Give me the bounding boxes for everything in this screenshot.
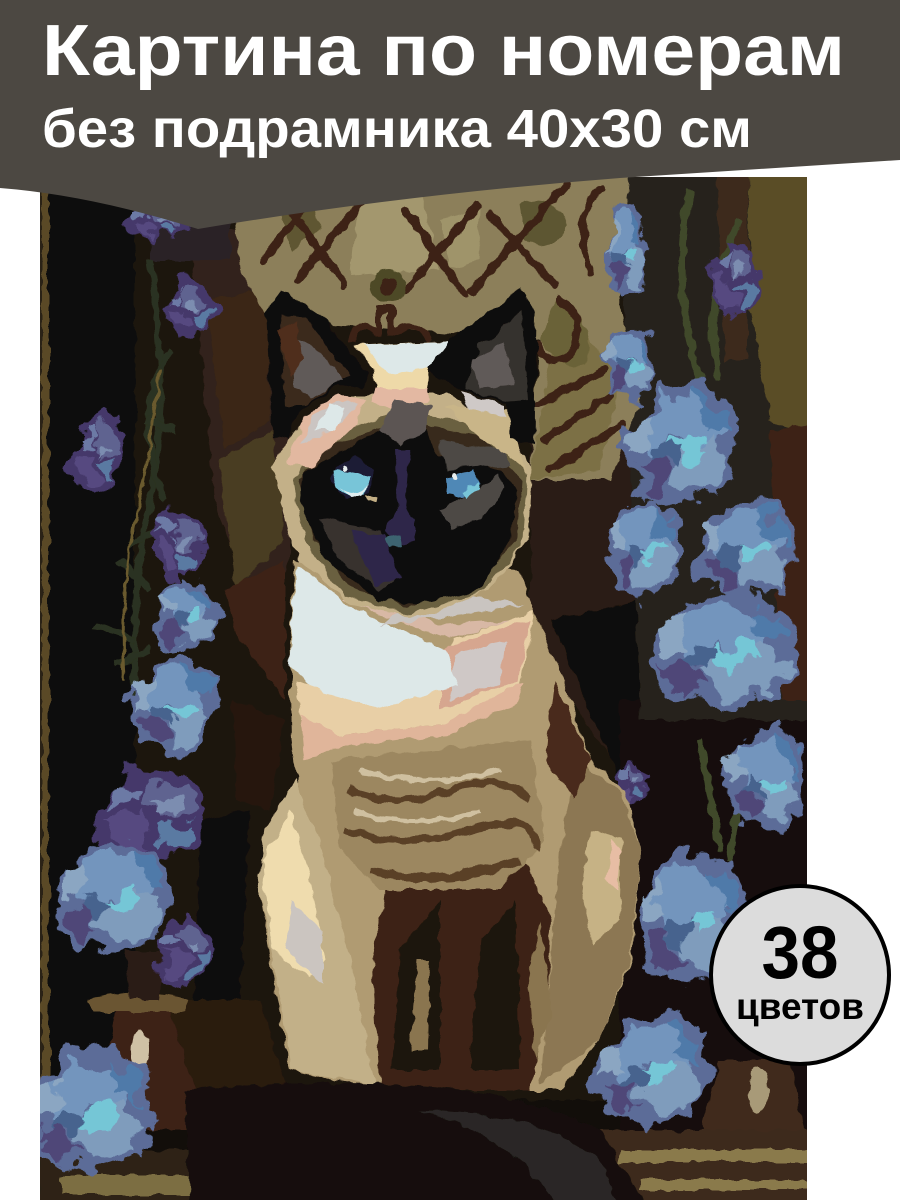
subtitle: без подрамника 40х30 см xyxy=(42,99,752,159)
cat chest xyxy=(290,565,525,708)
stems and leaves left xyxy=(95,260,175,700)
wallpaper xyxy=(230,170,640,480)
cat body xyxy=(258,560,640,1090)
ledge and vase right xyxy=(40,1060,815,1200)
cat ears xyxy=(265,288,537,444)
dark tail and ledge xyxy=(185,1083,650,1200)
cat face xyxy=(300,400,518,603)
vase left xyxy=(88,950,195,1130)
cat head xyxy=(272,342,532,618)
badge: 38 colours: 38 xyxy=(762,911,838,994)
stems right xyxy=(682,190,740,860)
title: Картина по номерам xyxy=(42,11,845,91)
badge: 38 colours xyxy=(711,886,889,1064)
header banner xyxy=(0,0,900,229)
painting: siamese cat with blue flowers xyxy=(28,170,815,1200)
badge: 38 colours: цветов xyxy=(736,986,864,1027)
flowers xyxy=(28,204,807,1173)
background panels xyxy=(30,170,815,1200)
